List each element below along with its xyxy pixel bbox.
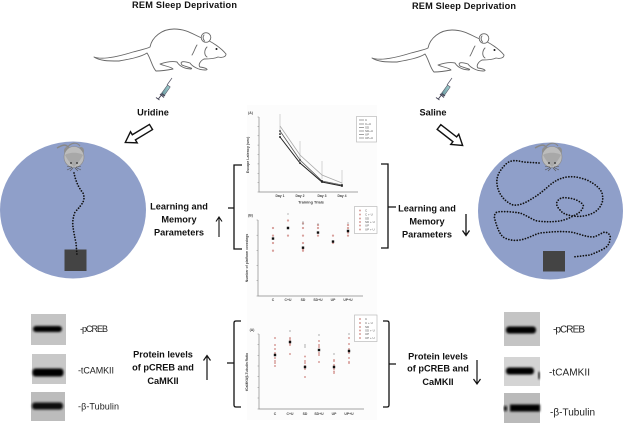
platform (64, 250, 86, 271)
icon: mouse (535, 143, 562, 171)
text: left protein levels: of pCREB and (132, 362, 194, 372)
legend B: UP + U (365, 228, 375, 232)
legend B (354, 206, 377, 234)
chart panels background (247, 105, 377, 420)
legend A (356, 116, 376, 142)
bracket: right lower (383, 321, 396, 407)
text: left learning and memory: Parameters (154, 228, 204, 238)
line chart: escape latency: Day 3 (317, 194, 327, 198)
dot plot: tCaMKII ratio: (A) (250, 328, 254, 332)
blot pCREB (504, 312, 540, 346)
blot labels: right (549, 324, 595, 418)
dot plot: platform crossings: UP+U (343, 298, 353, 302)
line chart: escape latency: Day 2 (295, 194, 305, 198)
legend A: UP+U (365, 136, 373, 140)
blot labels: right: -tCAMKII (549, 368, 590, 378)
panel: right water maze (478, 142, 623, 280)
text: left learning and memory: Learning and (150, 202, 208, 212)
icon: left rat (94, 29, 226, 71)
dot plot: platform crossings: UP (331, 298, 336, 302)
text: left learning and memory: Memory (161, 214, 198, 224)
dot plot: platform crossings: Number of platform crossings (245, 234, 249, 282)
legend C: SD + U (365, 328, 375, 332)
dot plot: platform crossings: (B) (248, 214, 253, 218)
legend A: SD+U (365, 129, 373, 133)
line chart: escape latency (246, 111, 376, 204)
legend C: C + U (365, 321, 373, 325)
text: right learning and memory (398, 204, 456, 240)
text: right protein levels (407, 352, 469, 387)
text: right learning and memory: Parameters (402, 230, 452, 240)
dot plot: tCaMKII ratio: UP+U (344, 412, 354, 416)
western blots: left (31, 314, 66, 421)
blot labels: right: -pCREB (553, 324, 585, 336)
line chart: escape latency: Escape Latency (sec) (246, 136, 250, 173)
blot labels: left: -tCAMKII (78, 366, 114, 376)
icon: left syringe (156, 78, 172, 100)
text: right learning and memory: Learning and (398, 204, 456, 214)
text: left protein levels (132, 350, 194, 386)
legend A: SD (365, 126, 370, 130)
dot plot: tCaMKII ratio: C (274, 412, 277, 416)
dot plot: tCaMKII ratio: SD (303, 412, 308, 416)
blot tCAMKII (32, 354, 66, 384)
blot tubulin (504, 393, 540, 423)
arrow: protein up (204, 356, 210, 380)
label: Uridine: Uridine (137, 108, 169, 118)
legend B: UP (365, 224, 369, 228)
blot pCREB (31, 314, 66, 345)
dot plot: platform crossings: C+U (285, 298, 292, 302)
platform (543, 251, 565, 272)
blot labels: right: -β-Tubulin (550, 408, 595, 418)
legend B: SD + U (365, 220, 375, 224)
arrow: left hollow arrow (122, 121, 154, 148)
text: right protein levels: CaMKII (422, 377, 454, 387)
western blots: right (504, 312, 540, 423)
line chart: escape latency: Day 1 (275, 194, 285, 198)
arrow: learning down (462, 214, 470, 236)
panel: left water maze (0, 142, 146, 278)
legend B: C (365, 208, 368, 212)
dot plot: tCaMKII ratio: tCaMKII/β-Tubulin Ratio (245, 353, 249, 391)
blot labels: left: -β-Tubulin (78, 402, 119, 412)
legend C: UP + U (365, 336, 375, 340)
bracket: left upper (228, 165, 242, 249)
text: right protein levels: Protein levels (408, 352, 468, 362)
arrow: right hollow arrow (435, 122, 467, 151)
icon: right rat (372, 30, 504, 72)
title: right REM Sleep Deprivation: REM Sleep Deprivation (412, 1, 516, 11)
legend A: C (365, 118, 368, 122)
dot plot: tCaMKII ratio: C+U (287, 412, 294, 416)
dot plot: tCaMKII ratio: SD+U (314, 412, 324, 416)
blot labels: left: -pCREB (80, 324, 108, 334)
label: Saline: Saline (419, 108, 447, 118)
blot tubulin (31, 392, 65, 421)
text: left protein levels: Protein levels (133, 350, 193, 360)
dot plot: tCaMKII ratio (245, 315, 377, 416)
text: left protein levels: CaMKII (147, 376, 179, 386)
bracket: right upper (381, 164, 396, 248)
line chart: escape latency: (A) (248, 111, 253, 115)
long swim path (494, 161, 610, 257)
line chart: escape latency: Day 4 (337, 194, 347, 198)
dot plot: platform crossings: C (272, 298, 275, 302)
legend C: UP (365, 332, 369, 336)
bracket: left lower (227, 321, 241, 407)
dot plot: platform crossings: SD (301, 298, 306, 302)
arrow: learning up (216, 217, 222, 237)
legend C: SD (365, 325, 370, 329)
icon: right syringe (436, 78, 452, 100)
legend A: C+U (365, 122, 371, 126)
text: right protein levels: of pCREB and (407, 364, 469, 374)
text: left learning and memory (150, 202, 208, 238)
direct swim path (73, 173, 84, 255)
legend A: UP (365, 132, 369, 136)
dot plot: platform crossings: SD+U (313, 298, 323, 302)
dot plot: platform crossings (245, 206, 377, 302)
legend B: SD (365, 216, 370, 220)
blot labels: left (78, 324, 119, 412)
legend C: C (365, 317, 368, 321)
title: left REM Sleep Deprivation: REM Sleep Deprivation (132, 0, 237, 10)
legend B: C + U (365, 212, 373, 216)
text: right learning and memory: Memory (409, 216, 446, 226)
line chart: escape latency: Training Trials (298, 200, 324, 204)
dot plot: tCaMKII ratio: UP (332, 412, 337, 416)
legend C (354, 315, 377, 342)
blot tCAMKII (504, 357, 540, 386)
icon: mouse (57, 143, 84, 171)
arrow: protein down (474, 360, 480, 384)
